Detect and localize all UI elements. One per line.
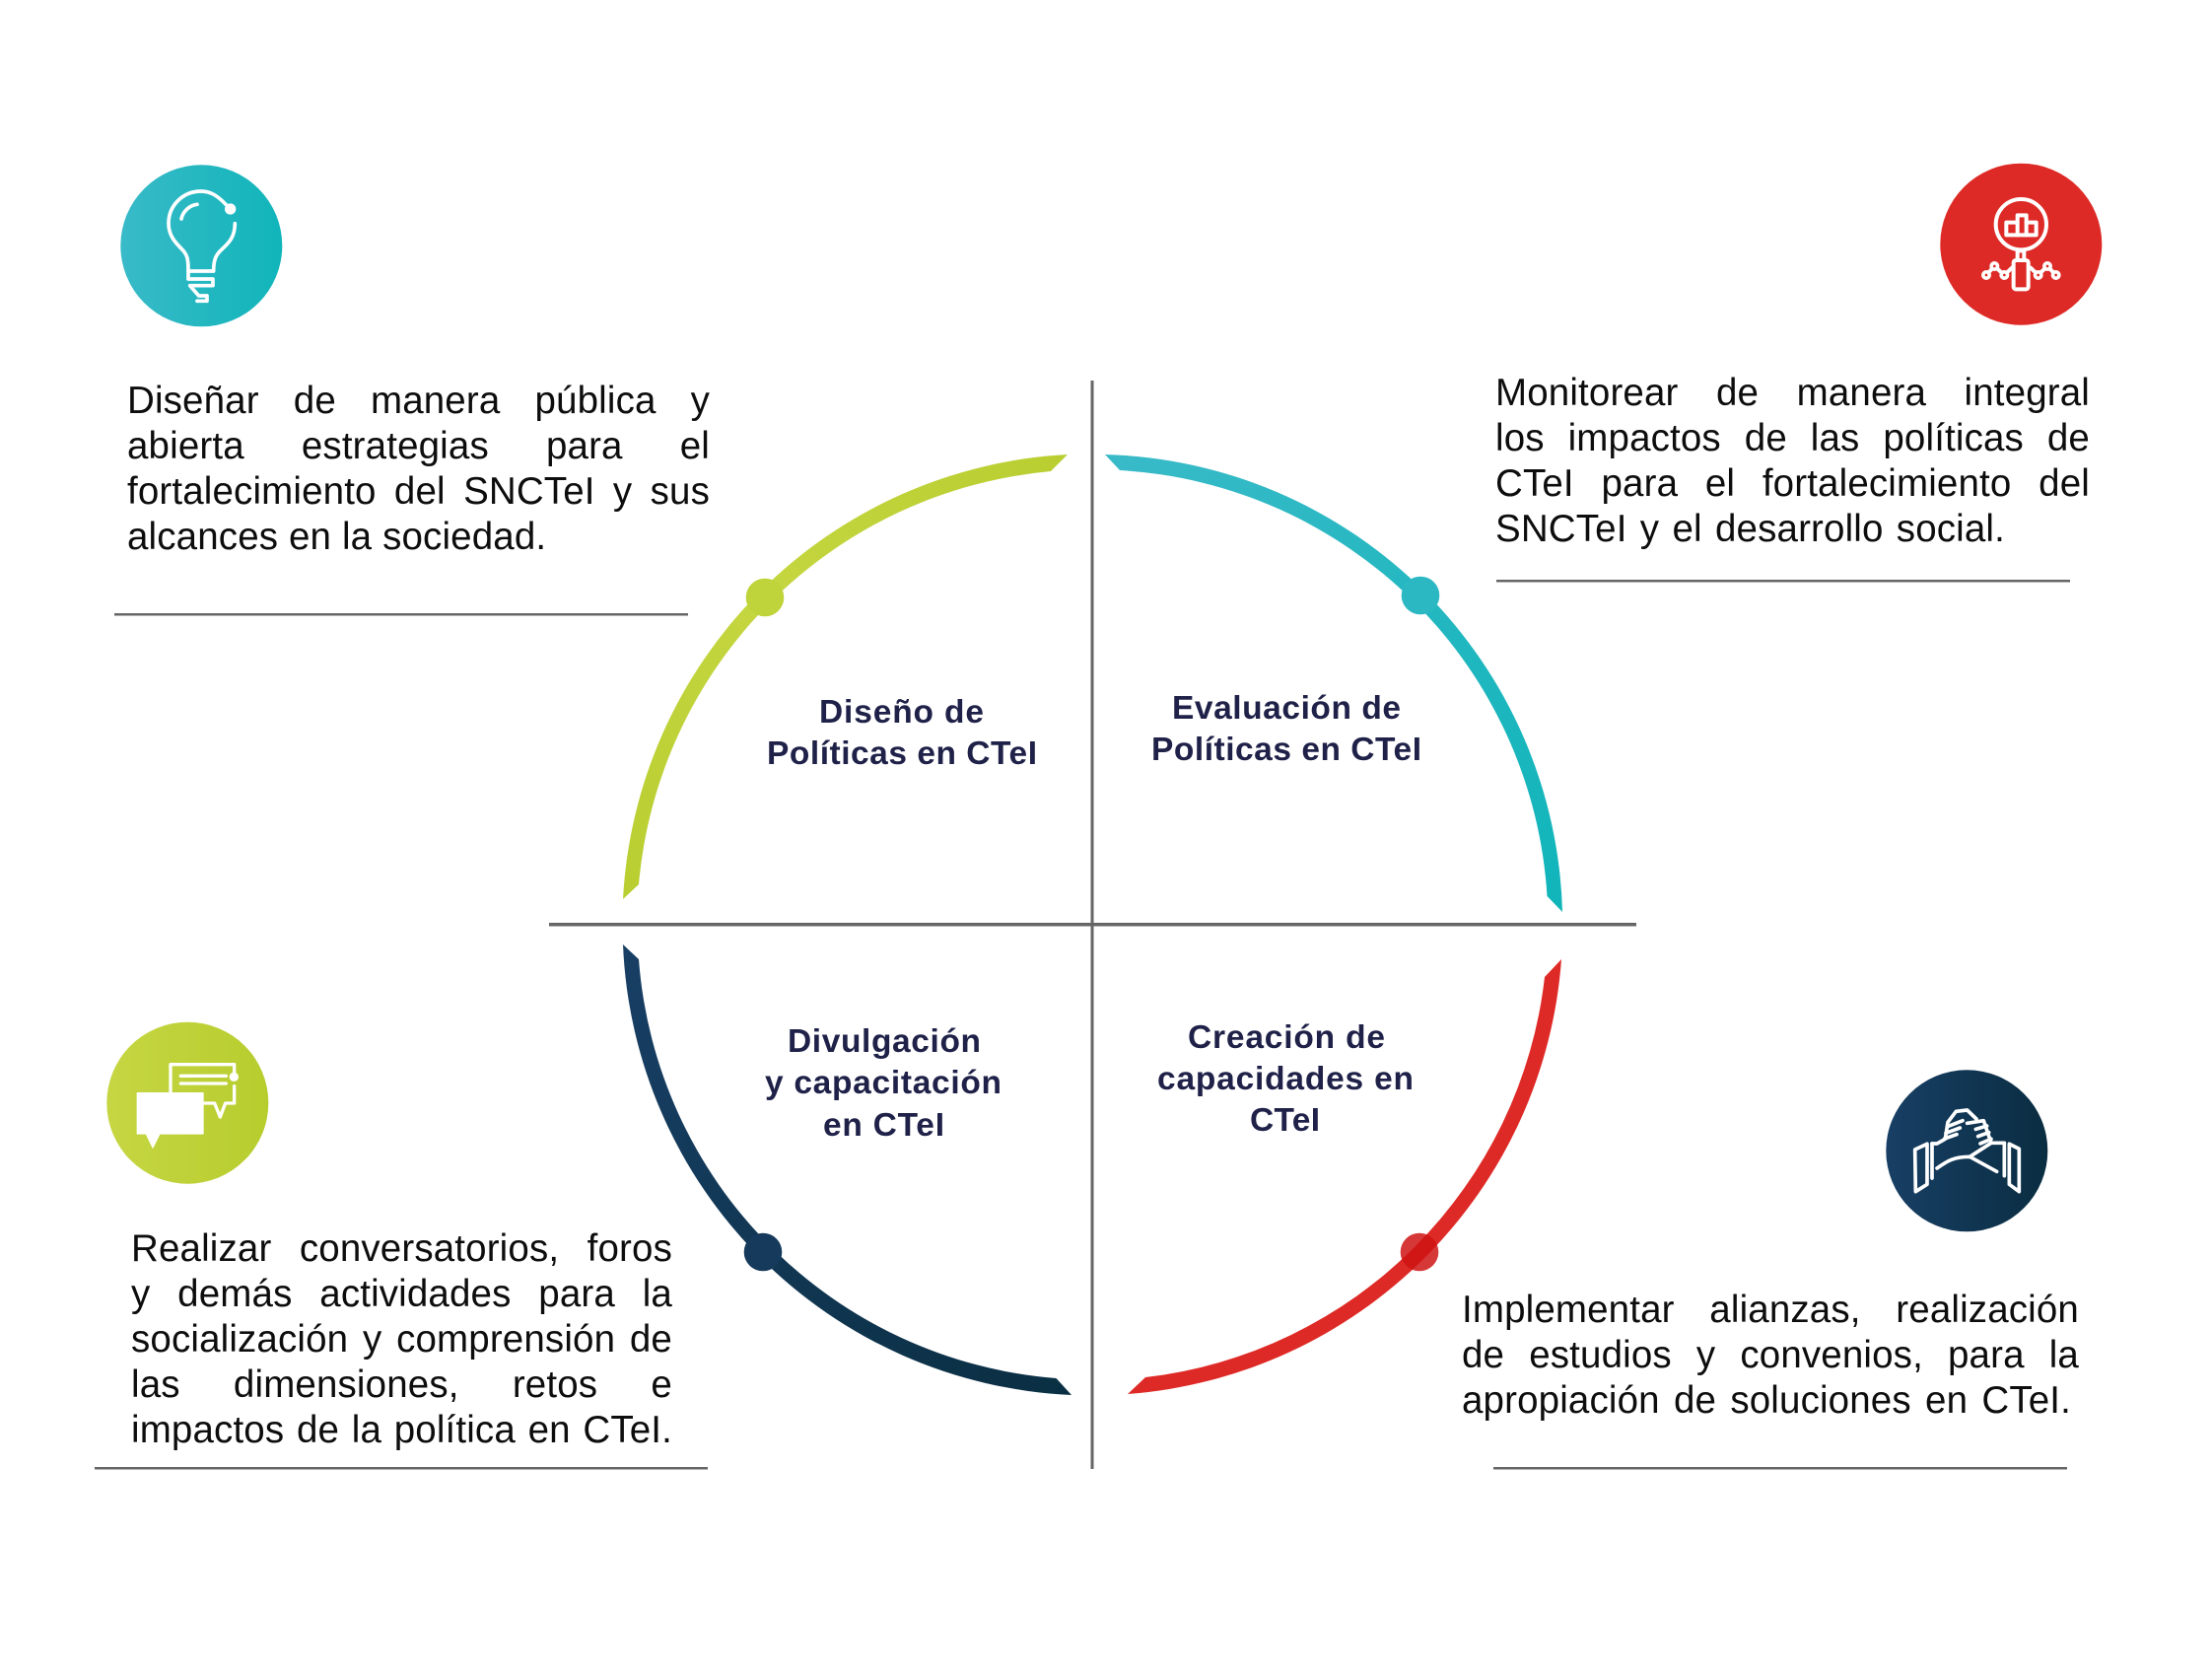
icon: joined hands xyxy=(1886,1070,2047,1231)
text: diseñar: Diseñar de manera pública y xyxy=(127,380,710,422)
axis: horizontal line xyxy=(549,923,1636,927)
label: Divulgación y capacitación en CTeI xyxy=(765,1023,1002,1144)
label: Creación de capacidades en CTeI: CTeI xyxy=(1250,1102,1320,1139)
label: Diseño de Políticas en CTeI xyxy=(767,694,1037,772)
arc: Creación (red) xyxy=(1128,959,1561,1394)
arc: Divulgación (navy) xyxy=(623,944,1071,1395)
rule: bottom left xyxy=(95,1467,708,1469)
text: implementar xyxy=(1462,1289,2079,1422)
arc: Diseño (lime) xyxy=(623,454,1068,899)
icon: magnifier with chart xyxy=(1940,164,2102,325)
text: monitorear: SNCTeI y el desarrollo social. xyxy=(1495,508,2005,550)
text: implementar: Implementar alianzas, realización xyxy=(1462,1289,2079,1331)
rule: top right xyxy=(1496,580,2070,582)
label: Evaluación de Políticas en CTeI: Evaluación de xyxy=(1172,690,1401,727)
text: implementar: apropiación de soluciones en CTeI. xyxy=(1462,1379,2071,1422)
arc: Evaluación (teal) xyxy=(1105,454,1562,912)
text: realizar: socialización y comprensión de xyxy=(131,1318,672,1361)
label: Creación de capacidades en CTeI: capacidades en xyxy=(1157,1061,1414,1097)
label: Diseño de Políticas en CTeI: Diseño de xyxy=(819,694,984,731)
text: realizar: y demás actividades para la xyxy=(131,1273,672,1315)
text: diseñar: fortalecimiento del SNCTeI y sus xyxy=(127,470,710,513)
label: Divulgación y capacitación en CTeI: en CTeI xyxy=(823,1107,944,1144)
text: monitorear: CTeI para el fortalecimiento del xyxy=(1495,462,2090,505)
text: realizar: Realizar conversatorios, foros xyxy=(131,1227,672,1270)
text: monitorear: los impactos de las políticas de xyxy=(1495,417,2090,459)
text: realizar xyxy=(131,1227,672,1451)
label: Creación de capacidades en CTeI xyxy=(1157,1019,1414,1139)
text: monitorear xyxy=(1495,372,2090,550)
label: Divulgación y capacitación en CTeI: y capacitación xyxy=(765,1065,1002,1101)
label: Evaluación de Políticas en CTeI: Políticas en CTeI xyxy=(1151,732,1421,768)
text: diseñar: alcances en la sociedad. xyxy=(127,516,546,558)
rule: top left xyxy=(114,613,688,615)
label: Divulgación y capacitación en CTeI: Divulgación xyxy=(788,1023,981,1060)
label: Evaluación de Políticas en CTeI xyxy=(1151,690,1421,768)
icon: light bulb xyxy=(120,165,282,326)
axis: vertical line xyxy=(1090,381,1094,1469)
text: diseñar: abierta estrategias para el xyxy=(127,425,710,467)
text: implementar: de estudios y convenios, para la xyxy=(1462,1334,2079,1376)
text: realizar: impactos de la política en CTeI. xyxy=(131,1409,672,1451)
text: diseñar xyxy=(127,380,710,558)
text: realizar: las dimensiones, retos e xyxy=(131,1363,672,1406)
label: Creación de capacidades en CTeI: Creación de xyxy=(1188,1019,1385,1056)
text: monitorear: Monitorear de manera integral xyxy=(1495,372,2090,414)
icon: speech bubbles xyxy=(106,1022,268,1184)
label: Diseño de Políticas en CTeI: Políticas en CTeI xyxy=(767,735,1037,772)
rule: bottom right xyxy=(1493,1467,2067,1469)
